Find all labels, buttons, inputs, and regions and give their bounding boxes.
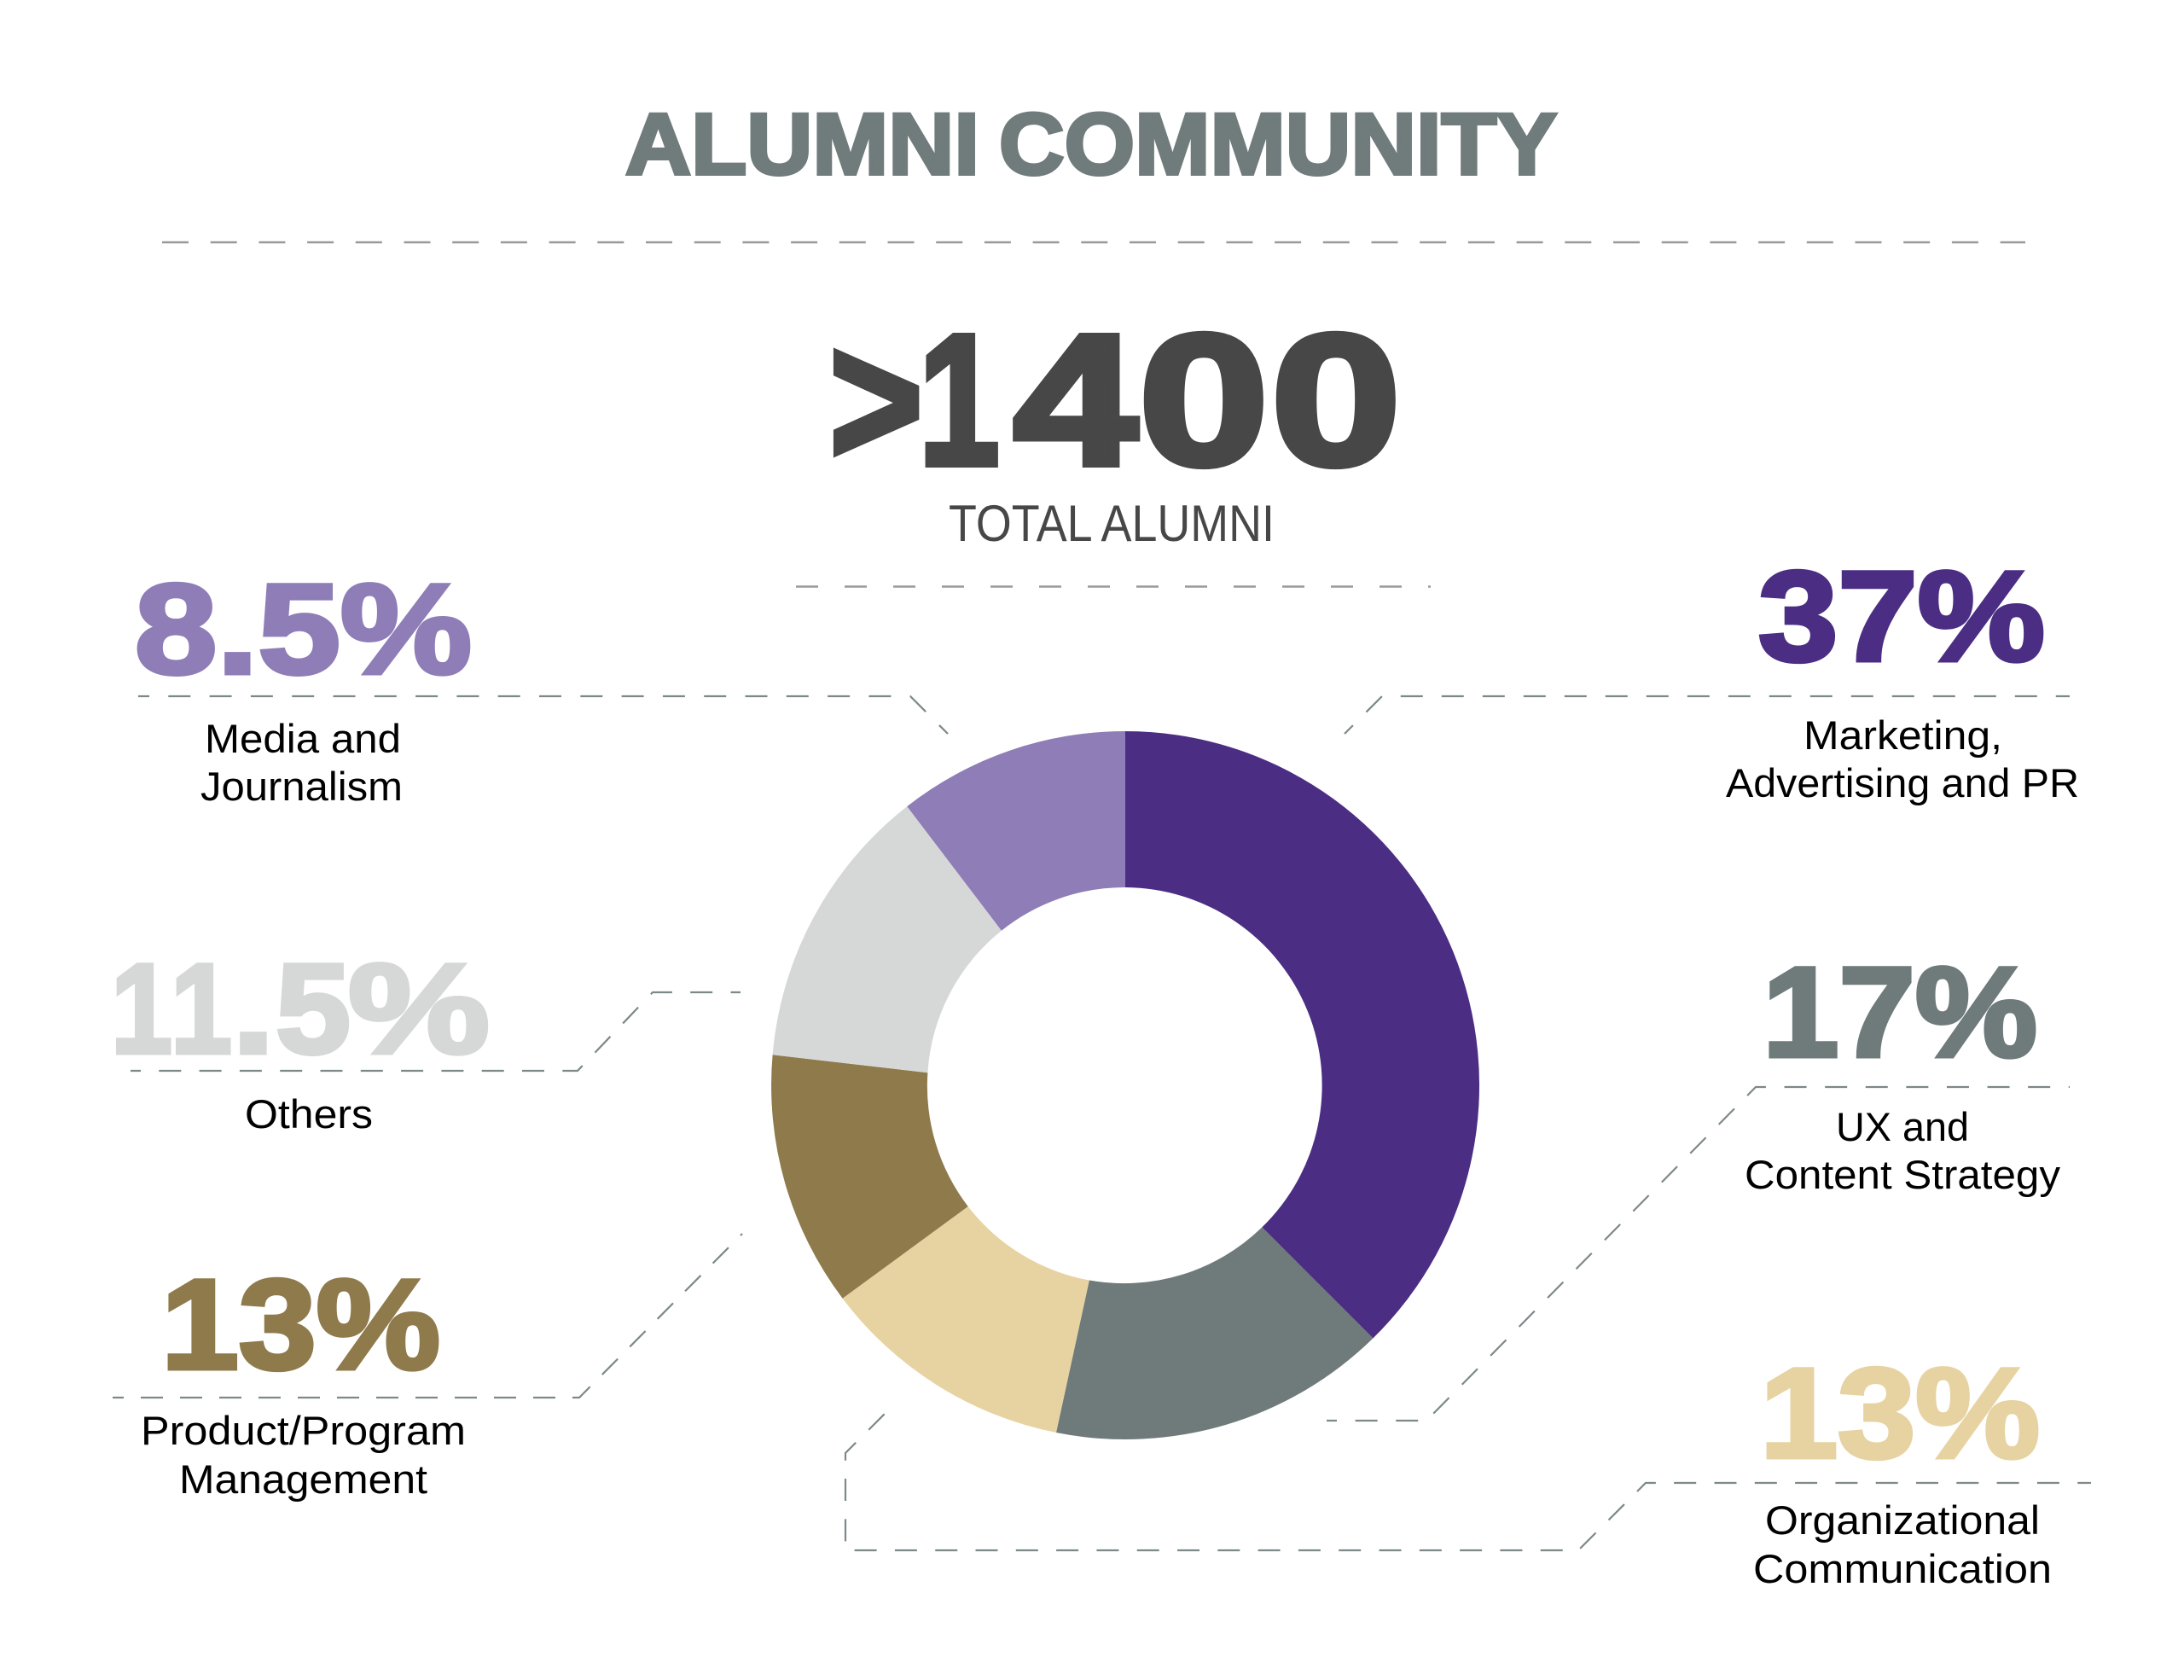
donut chart [771,731,1479,1439]
leader line [1345,696,2070,734]
slice: others 11.5% [773,806,1002,1073]
percentage: 17% [1763,940,2037,1084]
label: Advertising and PR [1726,760,2079,805]
total alumni figure: 1 [919,297,1000,504]
title: COMMUNITY [999,96,1557,193]
label: Others [245,1091,373,1136]
total alumni figure: 0 [1139,297,1269,504]
label: Content Strategy [1745,1152,2061,1197]
slice: UX and content strategy 17% [1056,1227,1373,1439]
percentage: 8.5% [135,557,472,700]
callout: UX and content strategy [1327,940,2070,1421]
slice: media and journalism 8.5% [907,731,1125,931]
percentage: 1 [111,937,172,1080]
leader line [138,696,948,734]
label: Product/Program [141,1408,466,1453]
total alumni figure: > [829,297,923,504]
callout: product/program management [113,1234,742,1502]
leader line [131,992,741,1071]
total alumni figure: 0 [1271,297,1401,504]
leader line [1327,1087,2070,1421]
leader line [845,1412,2091,1550]
slice: organizational communication 13% [843,1206,1089,1433]
callout: organizational communication [845,1341,2091,1591]
label: Management [179,1456,427,1502]
percentage: 37% [1758,544,2045,688]
total alumni caption: TOTAL ALUMNI [949,495,1275,552]
label: Communication [1753,1546,2052,1591]
callout: marketing, advertising and PR [1345,544,2079,805]
callout: media and journalism [135,557,948,809]
label: Marketing, [1804,712,2002,758]
leader line [113,1234,742,1398]
percentage: 13% [161,1253,440,1396]
percentage: % [348,937,490,1080]
title: ALUMNI [625,96,979,193]
label: Media and [205,716,401,761]
percentage: 13% [1760,1341,2040,1485]
slice: marketing, advertising and PR 37% [1125,731,1479,1338]
callout: others [111,937,741,1136]
total alumni figure: 4 [1014,297,1137,504]
label: UX and [1836,1104,1969,1149]
label: Organizational [1765,1497,2040,1543]
percentage: . [232,937,275,1080]
slice: product/program management 13% [771,1055,968,1299]
percentage: 1 [171,937,232,1080]
percentage: 5 [276,937,351,1080]
label: Journalism [200,764,403,809]
